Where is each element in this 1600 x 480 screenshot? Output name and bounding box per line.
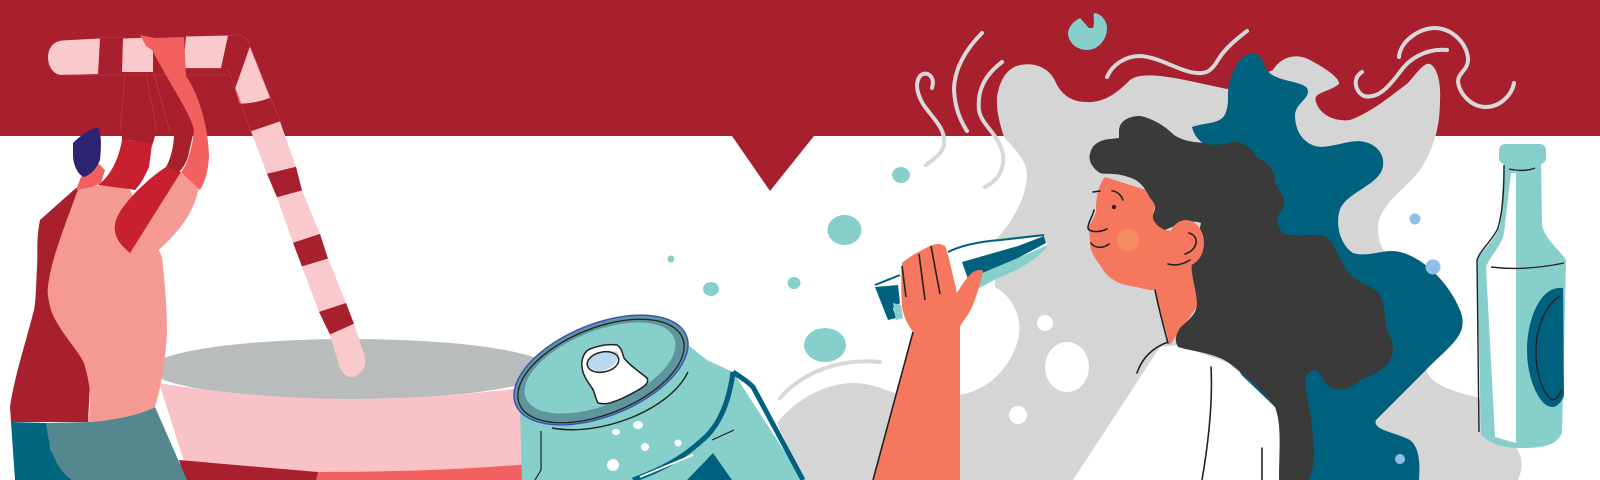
bottle highlight: [1486, 173, 1516, 443]
man: [10, 35, 209, 480]
can rim: [498, 293, 704, 447]
pull tab hole: [587, 351, 618, 372]
forearm coral: [140, 35, 209, 190]
teal leaf: [1068, 13, 1107, 50]
shorts dark: [11, 422, 72, 480]
dark teal blob: [1192, 54, 1463, 480]
upper arm: [130, 172, 199, 257]
near sleeve: [115, 167, 181, 253]
far sleeve top: [122, 136, 155, 146]
teal bubbles: [668, 167, 910, 362]
cup base dark: [179, 460, 318, 480]
pull tab: [582, 345, 648, 404]
neck and face: [1089, 177, 1200, 345]
can edge: [633, 372, 803, 480]
smoke squiggles: [780, 28, 1514, 398]
far arm sleeve: [98, 140, 152, 190]
cup base coral: [316, 464, 530, 480]
bottle label: [1527, 288, 1564, 407]
striped straw: [48, 35, 365, 377]
small bottle in hand: [875, 235, 1048, 320]
neck: [76, 160, 105, 190]
can lip lines: [552, 372, 688, 430]
grey smoke blob: [880, 56, 1522, 480]
ear: [1168, 220, 1204, 266]
forearm dark: [166, 130, 194, 172]
can lines: [535, 430, 734, 480]
hair: [73, 128, 101, 177]
bottle lines: [1477, 165, 1564, 432]
bottle body: [1477, 163, 1566, 448]
cheek: [1117, 229, 1139, 251]
soda can: [498, 293, 803, 480]
woman: [1073, 116, 1393, 480]
eye: [1112, 205, 1116, 209]
bottle cap: [1499, 144, 1546, 164]
grey lump behind arm: [777, 383, 900, 480]
back: [10, 187, 90, 422]
shorts light: [46, 407, 187, 480]
blue bubbles: [1395, 214, 1440, 464]
hair: [1089, 116, 1393, 480]
giant cup: [150, 339, 550, 480]
arm and hand: [873, 244, 983, 480]
can body: [520, 345, 803, 480]
cup drink surface: [150, 339, 550, 399]
can shadow: [687, 453, 732, 480]
can lid: [512, 304, 688, 432]
facial lines: [1088, 191, 1262, 480]
cup body: [159, 383, 530, 480]
big bottle: [1477, 144, 1566, 448]
shirt: [1073, 345, 1281, 480]
white bubbles: [1009, 315, 1089, 424]
can white stripe: [640, 455, 693, 477]
red header band with speech pointer: [0, 0, 1600, 191]
can fizz dots: [607, 421, 682, 471]
can rim line: [503, 298, 699, 444]
torso: [48, 186, 167, 422]
